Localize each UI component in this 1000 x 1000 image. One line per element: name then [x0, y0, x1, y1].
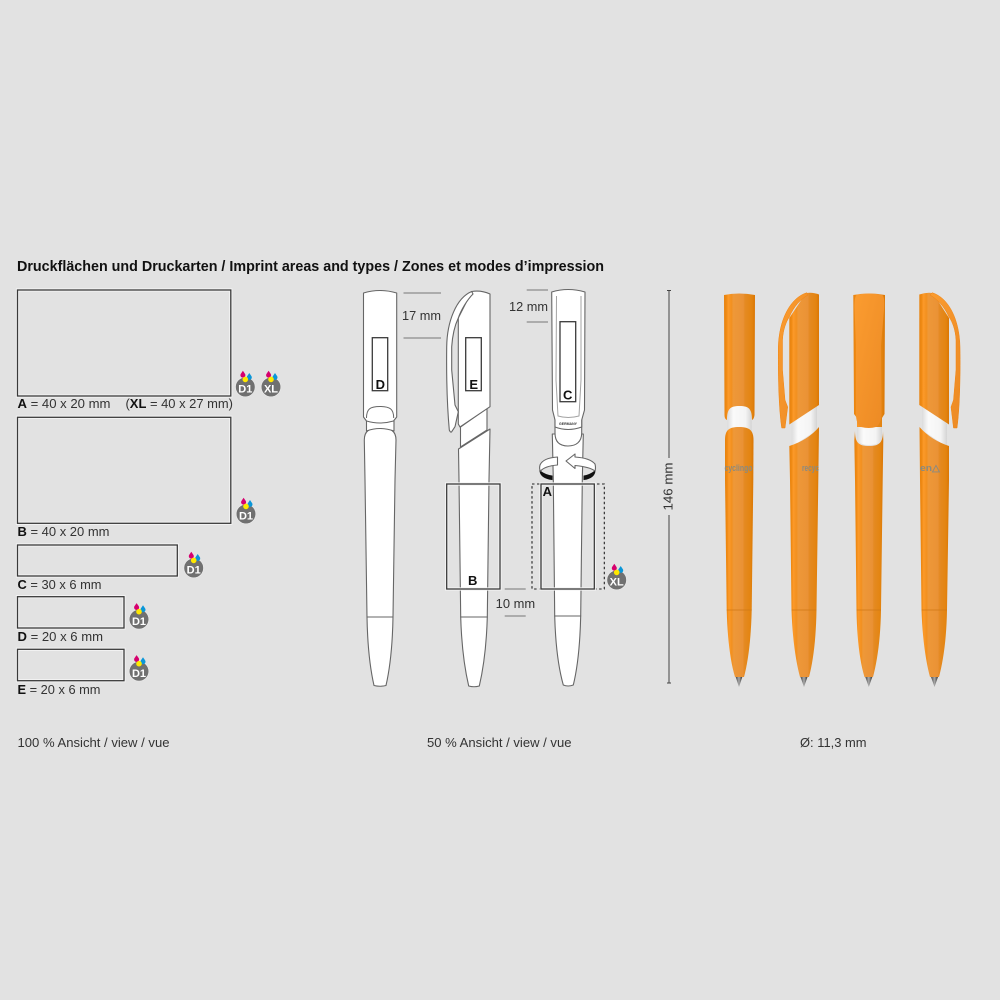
icon: XL print type for A: XL	[264, 384, 278, 396]
orange pen: left side view	[778, 293, 819, 687]
GERMANY mark: GERMANY	[559, 422, 578, 426]
label C: C = 30 x 6 mm	[18, 578, 102, 592]
imprint box A	[18, 290, 231, 396]
imprint box B	[18, 417, 231, 523]
dimension: 10 mm: 10 mm	[496, 597, 535, 611]
dimension: 12 mm	[509, 290, 548, 322]
icon: D1 print type for E	[129, 655, 149, 681]
label A	[18, 397, 233, 411]
dimension: 10 mm	[496, 589, 535, 616]
icon: D1 print type for B: D1	[239, 510, 253, 522]
icon: XL print type for A	[261, 371, 281, 397]
area A with XL dashed outline	[532, 484, 604, 589]
icon: D1 print type for B	[236, 498, 256, 524]
icon: D1 print type for A: D1	[238, 384, 252, 396]
icon: D1 print type for E: D1	[132, 668, 146, 680]
area D: D	[376, 377, 385, 392]
caption: 100 percent view: 100 % Ansicht / view / vue	[18, 736, 170, 750]
area D	[372, 338, 388, 392]
dashed XL area	[532, 484, 604, 589]
imprint box D	[18, 597, 124, 628]
icon: D1 print type for C	[184, 552, 204, 578]
label A: A = 40 x 20 mm	[18, 397, 110, 411]
orange pen: clip view	[853, 294, 885, 687]
area C: C	[563, 388, 573, 402]
dimension: 12 mm: 12 mm	[509, 300, 548, 314]
area E	[466, 338, 481, 392]
label D: D = 20 x 6 mm	[18, 630, 103, 644]
logo on barrel: cyclingo	[724, 463, 753, 474]
icon: D1 print type for D	[129, 603, 149, 629]
dimension: 146 mm	[662, 290, 676, 683]
icon: D1 print type for D: D1	[132, 616, 146, 628]
line drawing: pen front view with area D	[364, 290, 397, 686]
panel: imprint size boxes	[18, 290, 233, 697]
imprint box E	[18, 649, 124, 681]
caption: 50 percent view: 50 % Ansicht / view / vue	[427, 736, 572, 750]
icon: XL print type on pen	[607, 564, 626, 590]
area C	[560, 322, 576, 402]
icon: D1 print type for C: D1	[187, 564, 201, 576]
orange pen: right side view	[919, 293, 960, 687]
label E: E = 20 x 6 mm	[18, 683, 100, 697]
title: Druckflächen und Druckarten / Imprint areas and types / Zones et modes d’impression	[17, 259, 604, 275]
dimension: 146 mm: 146 mm	[662, 462, 676, 510]
area B	[447, 484, 500, 589]
area B: B	[468, 573, 477, 588]
icon: XL print type on pen: XL	[610, 576, 624, 588]
logo on barrel: recyc	[802, 463, 819, 474]
icon: D1 print type for A	[236, 371, 255, 397]
area A box: A	[543, 484, 553, 499]
imprint box C	[18, 545, 177, 576]
orange pen: front view	[724, 294, 755, 687]
label B: B = 40 x 20 mm	[18, 525, 110, 539]
label A: (XL = 40 x 27 mm)	[126, 397, 233, 411]
dimension: 17 mm: 17 mm	[402, 309, 441, 323]
logo on barrel: en△	[920, 463, 941, 474]
line drawing: pen side view with area E and B	[447, 291, 500, 687]
dimension: 17 mm	[402, 293, 441, 338]
area E: E	[469, 377, 478, 392]
line drawing: pen clip view with area C and A	[552, 290, 585, 686]
caption: diameter: Ø: 11,3 mm	[800, 736, 866, 750]
icon: rotation arrows	[540, 454, 596, 480]
